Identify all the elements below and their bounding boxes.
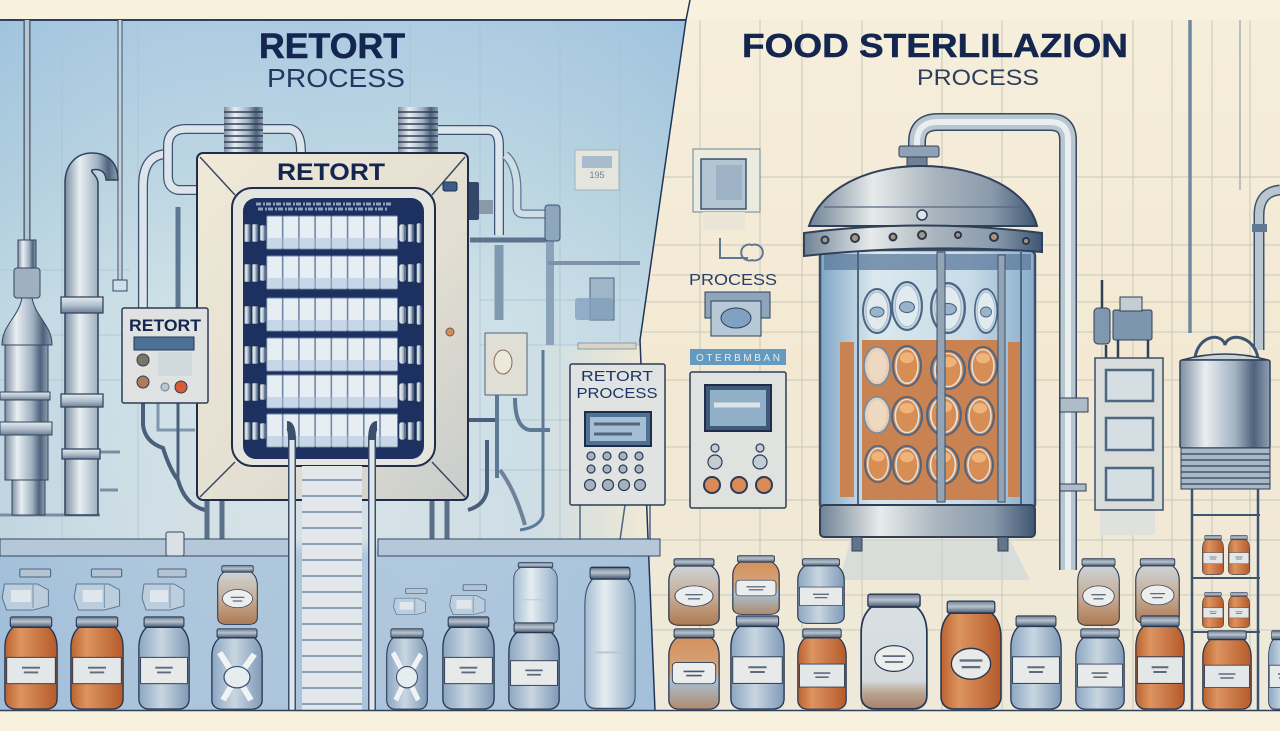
heading: retort process: RETORT (259, 27, 405, 66)
panel: food sterilization background (640, 20, 1280, 711)
small device right of vessel (1094, 280, 1152, 358)
small switches (708, 444, 767, 469)
panel: food sterilizer vessel (804, 166, 1042, 551)
interior legend band (256, 204, 392, 209)
stand under controller (580, 505, 650, 540)
keypad (584, 452, 646, 490)
heading: food sterilization process: FOOD STERLILAZION (742, 27, 1128, 64)
icon: big arched pipe (61, 153, 118, 515)
panel: retort machine (197, 153, 468, 500)
top ring with rivets (804, 226, 1042, 256)
support frame (207, 500, 447, 540)
vertical bars (858, 252, 1021, 505)
far right pipe (1252, 190, 1280, 350)
conveyor (287, 425, 377, 710)
heading: food sterilization process (742, 27, 1128, 90)
controller screen (585, 412, 651, 446)
diagonal divider (640, 0, 690, 711)
small wall gauges right of retort (466, 150, 636, 395)
sealed containers upper row (863, 282, 997, 333)
icon: process gadget (705, 292, 770, 336)
shelf rail (0, 532, 660, 556)
panel: retort process controller (570, 364, 665, 505)
label: process: PROCESS (689, 272, 777, 289)
icon: storage tank (1180, 337, 1270, 489)
panel: retort process controller: PROCESS (576, 385, 658, 402)
orange buttons (704, 477, 772, 493)
shelf uprights (1192, 489, 1260, 711)
controller screen (705, 385, 771, 431)
panel: retort process controller: RETORT (581, 368, 653, 385)
orange contents (840, 340, 1020, 500)
panel: retort control box: RETORT (129, 316, 202, 335)
icon: retort coil vents (224, 107, 438, 153)
label: blue strip: OTERBMBAN (696, 353, 780, 364)
heading: retort process: PROCESS (267, 63, 405, 93)
dome (809, 166, 1037, 226)
background pipework: left (0, 20, 301, 515)
bottom edge (0, 710, 1280, 731)
label: blue strip (690, 349, 786, 365)
label: retort machine name: RETORT (277, 159, 385, 186)
sealed containers lower rows (864, 346, 997, 484)
background pipework: right of retort (438, 130, 640, 530)
retort interior (243, 198, 424, 459)
panel: right gauges (1095, 358, 1163, 535)
base ring (820, 505, 1035, 551)
retort indicator light (443, 182, 457, 191)
jars: right upper row (669, 535, 1250, 628)
vessel glass (820, 250, 1035, 510)
jars: right lower row (669, 594, 1280, 709)
retort door frame (232, 188, 435, 466)
panel: retort process background (0, 20, 686, 711)
upper wall gauge (693, 149, 763, 260)
small wall gauges right of retort: 195 (589, 170, 605, 180)
glass top shade (824, 254, 1031, 270)
jars: left upper row, faint (2, 563, 557, 624)
retort orange lamp (446, 328, 454, 336)
heading: food sterilization process: PROCESS (917, 65, 1039, 90)
heading: retort process (259, 27, 405, 93)
pouch racks (244, 216, 422, 447)
jars: left lower row (5, 567, 635, 709)
sterilizer pipe (899, 122, 1088, 570)
icon: left equipment column (0, 240, 52, 515)
panel: food sterilization controller (690, 372, 786, 508)
panel: retort control box (122, 308, 208, 403)
